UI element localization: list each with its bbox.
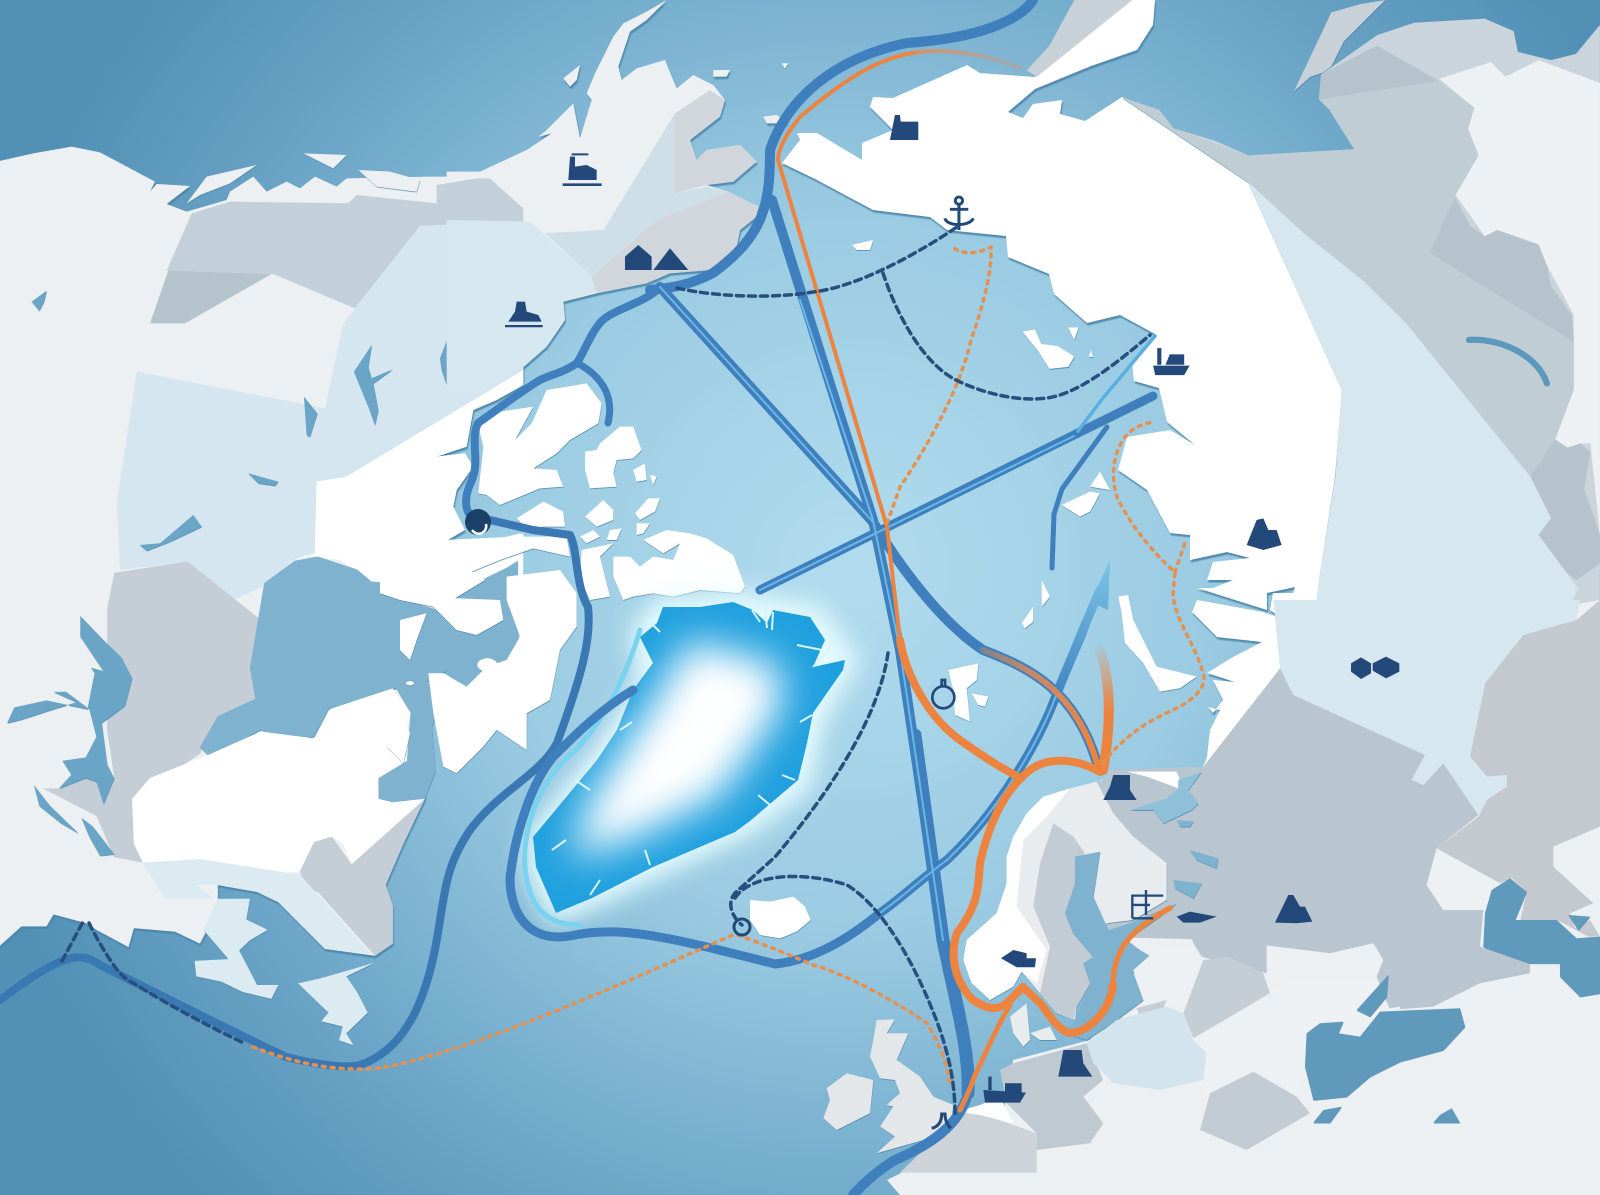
region: grey France — [900, 1113, 1037, 1173]
Iceland — [750, 897, 811, 938]
icon: anchor — [945, 197, 973, 230]
region: Far east grey — [1437, 600, 1600, 937]
icon: Iceland port ring — [734, 919, 750, 935]
region: grey Prairies — [43, 561, 262, 863]
Greenland fjord spikes — [552, 610, 830, 895]
Wrangel and Bering islands — [782, 63, 873, 250]
Finland south — [1133, 947, 1200, 1010]
icon: factory Germany — [1058, 1050, 1092, 1077]
Greenland ring route — [510, 625, 1085, 964]
Alaska regions — [447, 90, 758, 392]
arrow to Kara Sea — [1057, 560, 1110, 693]
region: light Ukraine — [1197, 978, 1400, 1100]
region: Siberia white mainland — [782, 0, 1342, 767]
Canada to Siberia diagonal — [760, 396, 1153, 590]
Svalbard — [948, 663, 988, 722]
icons — [465, 115, 1399, 1128]
icon: Svalbard port ring — [932, 680, 954, 708]
region: near white East Siberia — [1439, 60, 1600, 535]
Sakhalin peninsula — [1294, 0, 1385, 91]
inland lakes — [1173, 820, 1218, 898]
Denmark — [1010, 1003, 1030, 1047]
region: mid blue — [545, 113, 728, 277]
icon: mining headframe — [653, 248, 688, 270]
dotted navy routes — [62, 227, 1150, 1115]
Canadian Arctic islands — [380, 383, 745, 773]
Siberian branch — [1052, 427, 1107, 568]
Gulf coast islands — [195, 899, 375, 1045]
icon: building Alaska — [625, 245, 652, 270]
icon: factory Siberia — [890, 115, 918, 140]
region: pale Poland — [1087, 1007, 1207, 1090]
Novaya Zemlya — [1118, 595, 1197, 692]
Norway coast to Baltic route — [954, 761, 1113, 1033]
icon: factory Kola — [1103, 775, 1137, 800]
region: grey Yukon — [167, 178, 523, 308]
lakes: northwest — [32, 291, 473, 551]
icon: ship Yukon — [505, 302, 543, 327]
Northeast trunk route — [650, 0, 1033, 290]
fork tail — [577, 363, 610, 423]
Scandinavia land — [963, 782, 1167, 1020]
Aleutian island chain — [187, 153, 420, 203]
Northwest Passage route — [0, 520, 589, 1066]
Norway white — [963, 788, 1070, 1000]
region: grey European Russia — [1060, 668, 1530, 1010]
region: grey Ukraine south — [1200, 1072, 1310, 1150]
region: pale blue West Siberia lower — [1273, 600, 1580, 815]
icon: ship East Siberian Sea — [1153, 348, 1190, 375]
Pacific to pole route — [778, 53, 913, 640]
region: grey Baltic states — [1137, 1000, 1167, 1017]
region: grey Germany — [1000, 1043, 1103, 1150]
Greenland ice sheet — [533, 602, 845, 913]
Sweden grey — [1033, 823, 1093, 1020]
Greenland coast ring cyan — [525, 630, 640, 925]
New Siberian Islands — [1023, 327, 1093, 369]
region: dark grey Far East — [1319, 46, 1439, 99]
icon: ship Norway — [1001, 950, 1036, 967]
Hudson Bay and Foxe Basin — [200, 557, 518, 802]
Iceland and British Isles — [750, 897, 953, 1153]
icon: crane — [1132, 890, 1163, 918]
icon: mountain Russia — [1275, 895, 1312, 923]
fading top route — [913, 51, 1020, 68]
icon: ship Baltic — [1177, 912, 1217, 923]
lake: Baikal — [1469, 340, 1547, 383]
White Sea — [1130, 772, 1202, 823]
region: pale US southeast — [143, 859, 371, 954]
Great Lakes — [7, 616, 132, 856]
Black Sea, Azov, Caspian and Aral — [1305, 878, 1600, 1123]
region: grey Kola and Karelia — [1090, 773, 1267, 973]
region: white Quebec and Ontario — [132, 688, 425, 873]
dotted orange routes — [253, 245, 1204, 1087]
region: dark grey Mongolia — [1430, 197, 1574, 342]
North Sea branch — [960, 1005, 1010, 1110]
Greenland glow — [525, 590, 860, 925]
icon: Arctic node — [465, 509, 491, 535]
region: pale blue Northwest — [117, 222, 523, 600]
route highlights — [660, 287, 1074, 940]
icon: stacked layers — [1351, 657, 1399, 679]
landmass: Europe and Central Asia base — [887, 600, 1600, 1195]
regions: Eurasia east — [1122, 46, 1600, 650]
region: grey Kazakhstan upper — [1530, 439, 1600, 580]
icon: mountain East Siberia — [1247, 518, 1282, 550]
icon: factory Chukotka — [563, 153, 602, 186]
Alaska to Baffin route — [466, 290, 657, 522]
region: grey Siberia central — [1122, 81, 1574, 477]
region: pale northwest Canada — [447, 220, 598, 392]
region: pale blue West Siberia — [1248, 182, 1578, 650]
Ireland — [823, 1073, 873, 1130]
Greenland — [525, 590, 860, 925]
region: white Kola tip — [1127, 772, 1180, 788]
Europe detail regions — [900, 772, 1400, 1173]
Great Britain — [870, 1019, 953, 1153]
region: white Netherlands — [957, 1097, 1013, 1123]
Severnaya and Franz Josef islands — [1022, 472, 1197, 692]
region: grey Belarus — [1183, 957, 1270, 1038]
Pole to Barents diagonal — [660, 287, 1097, 763]
Greenland white centre — [570, 640, 780, 860]
landmass: North America base — [0, 0, 788, 956]
Barents fade branch — [1100, 650, 1109, 770]
shipping routes — [0, 0, 1204, 1195]
light branch — [1078, 336, 1155, 431]
region: white Arctic mainland — [293, 370, 523, 600]
Baltic Sea — [1063, 852, 1177, 1040]
region: Kazakhstan light — [1427, 848, 1500, 910]
region: grey Alaska north — [592, 192, 758, 293]
landmass: Eurasia east upper — [1122, 0, 1600, 650]
shipping routes: orange — [778, 51, 1170, 1110]
region: grey wedge Bering — [1027, 0, 1132, 77]
region: darker grey band — [150, 271, 272, 323]
region: grey Seward — [675, 90, 757, 193]
region: grey Maritime — [300, 799, 425, 956]
icon: Dover tool — [932, 1114, 951, 1128]
icon: cargo ship — [983, 1077, 1026, 1103]
Transpolar route — [772, 200, 968, 1195]
